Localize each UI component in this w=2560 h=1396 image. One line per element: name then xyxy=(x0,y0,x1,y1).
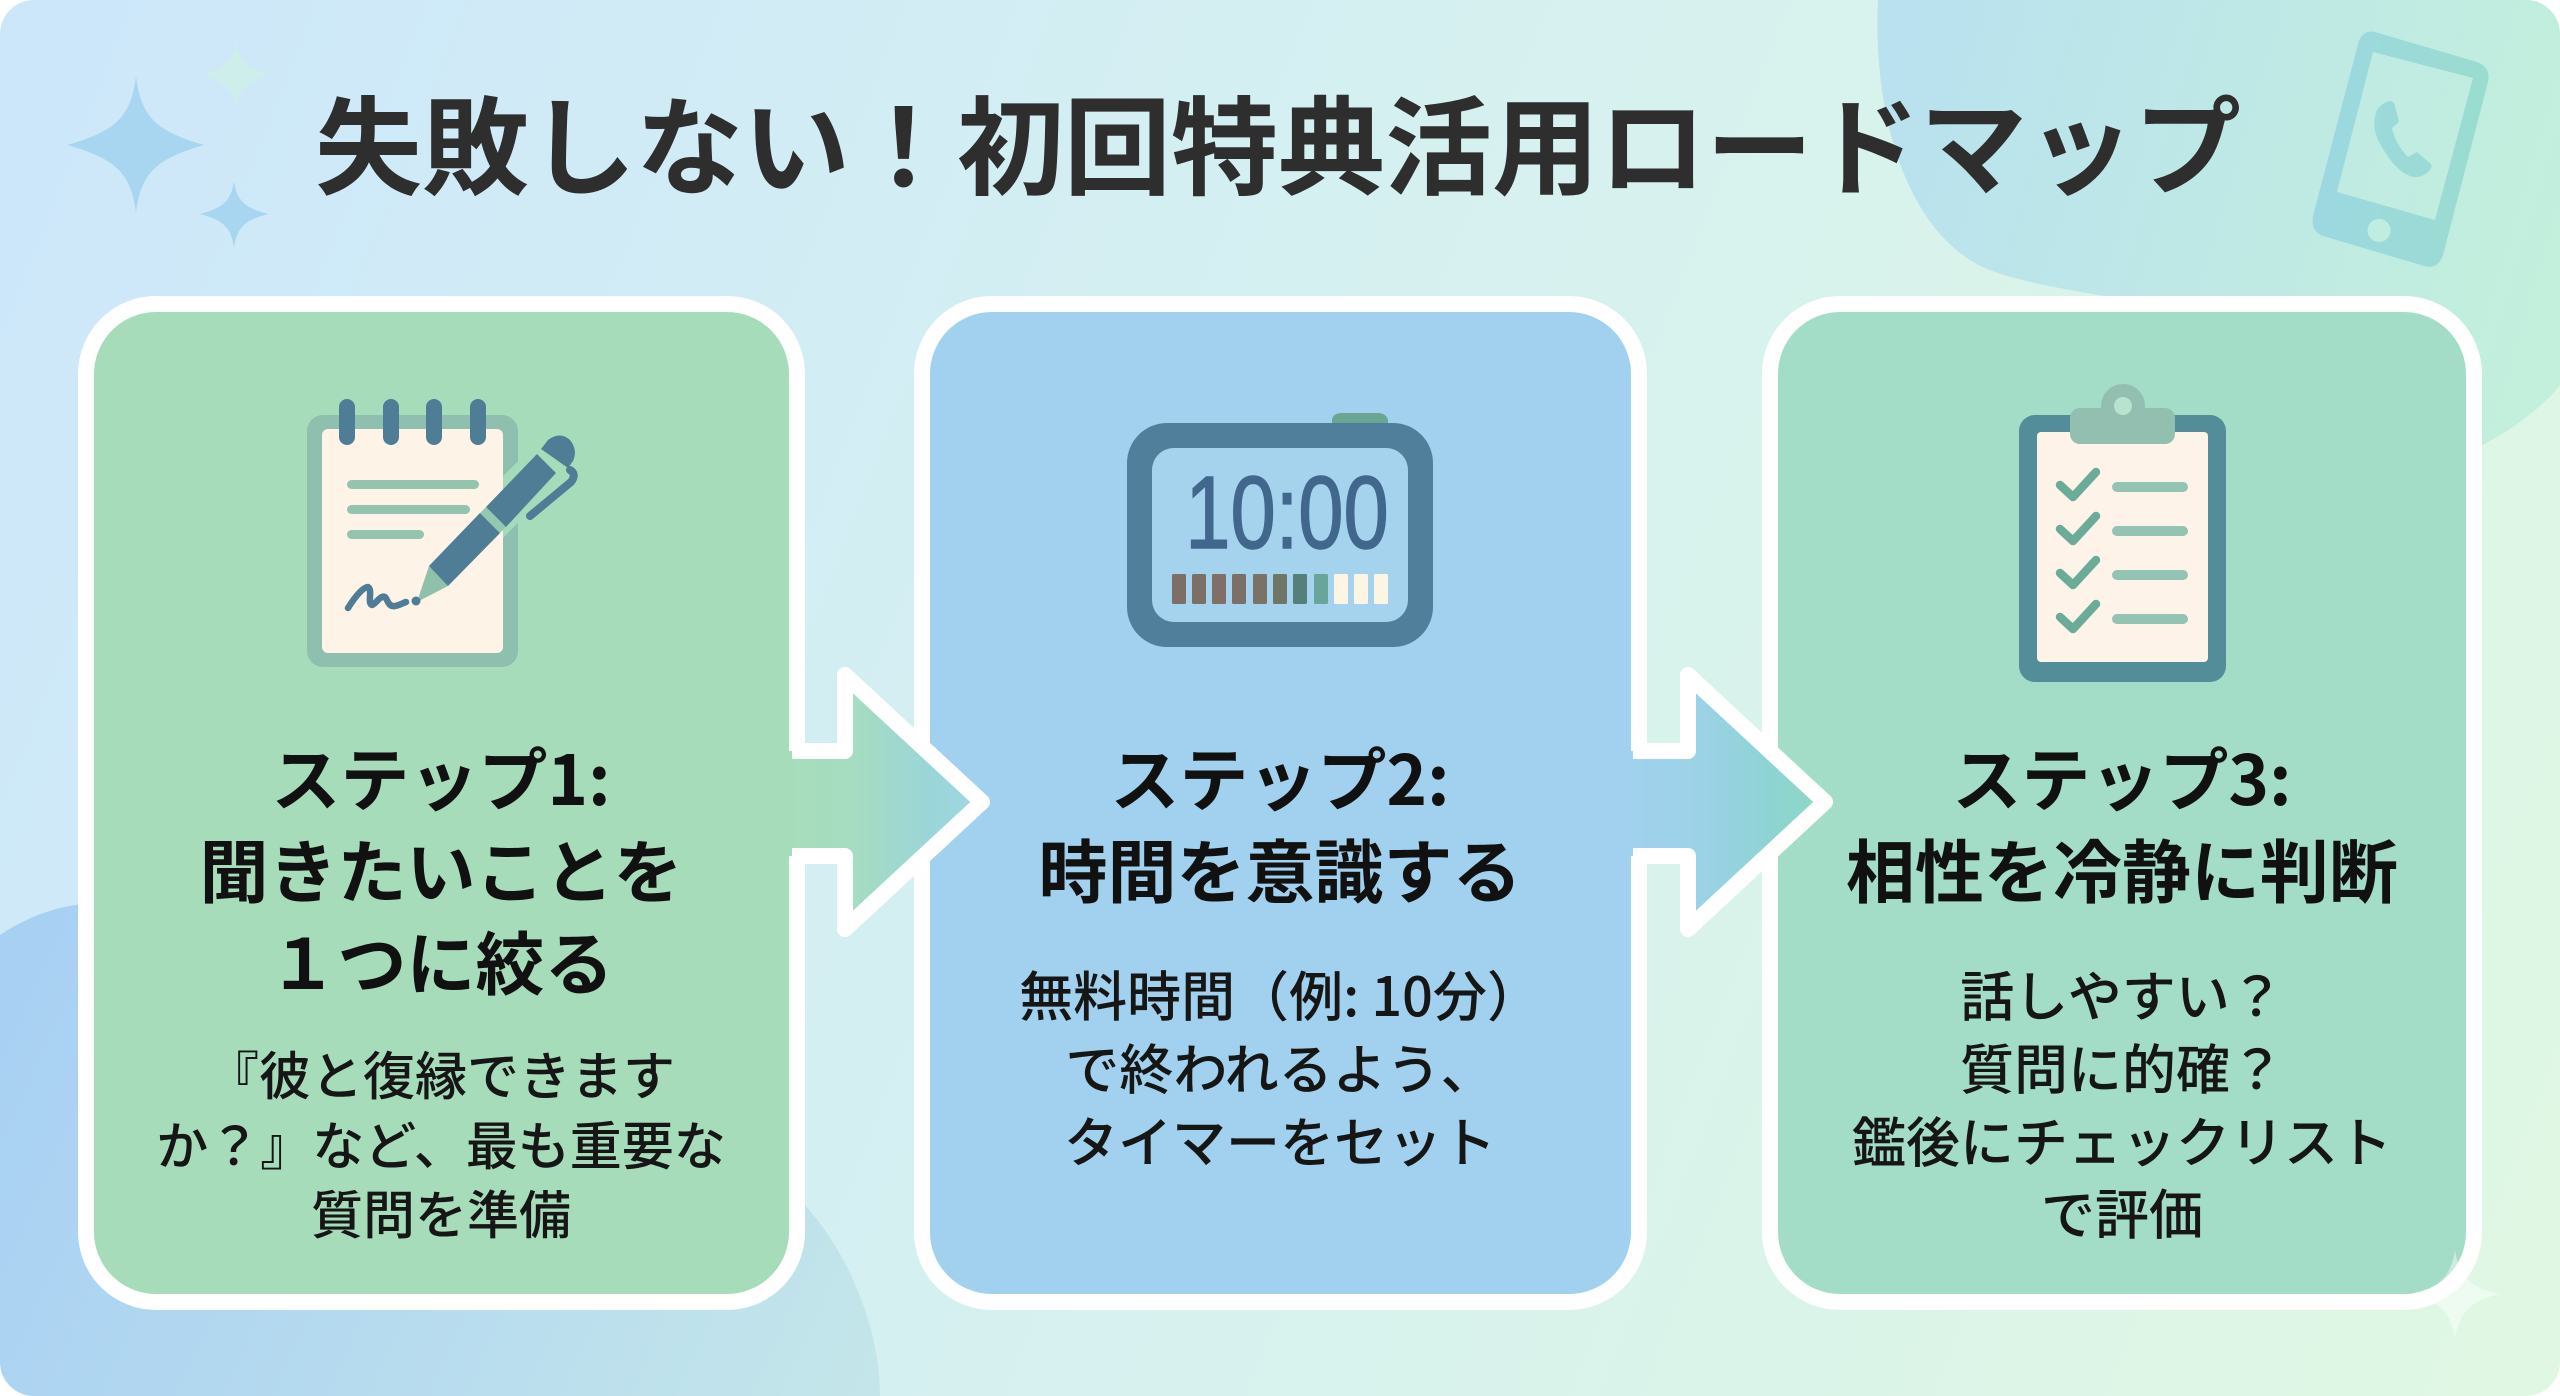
sparkle: bottom right xyxy=(2410,1250,2500,1339)
timer progress bar xyxy=(1172,574,1388,604)
icon: digital timer xyxy=(1127,413,1433,647)
heading: step 2: ステップ2: xyxy=(1110,725,1450,825)
panel: step 3 card xyxy=(1770,304,2474,1302)
body: step 3: 質問に的確？ xyxy=(1960,1026,2284,1105)
icon: phone xyxy=(2312,32,2489,267)
body: step 3: で評価 xyxy=(2041,1171,2203,1250)
body: step 2: 無料時間（例: 10分） xyxy=(1019,953,1541,1032)
sparkle: faint upper xyxy=(202,41,270,109)
icon: phone handset xyxy=(2374,101,2432,177)
panel: step 1 card xyxy=(86,304,797,1302)
background blob: bottom left xyxy=(0,903,880,1396)
heading: step 1: ステップ1: xyxy=(271,725,611,825)
sparkle: large xyxy=(67,76,204,213)
sparkle: small lower xyxy=(200,181,268,248)
body: step 1: か？』など、最も重要な xyxy=(156,1105,726,1180)
icon: clipboard checklist xyxy=(2019,384,2226,682)
heading: step 1: 聞きたいことを xyxy=(200,817,682,917)
body: step 1: 『彼と復縁できます xyxy=(207,1035,675,1110)
heading: step 3: ステップ3: xyxy=(1952,725,2292,825)
arrow: step 2 to step 3 xyxy=(1628,675,1825,929)
body: step 3: 話しやすい？ xyxy=(1960,953,2284,1032)
arrow: step 1 to step 2 xyxy=(786,675,982,929)
body: step 2: で終われるよう、 xyxy=(1065,1026,1495,1105)
body: step 3: 鑑後にチェックリスト xyxy=(1852,1099,2392,1178)
background blob: top right xyxy=(1877,0,2560,446)
icon: notepad and pen xyxy=(307,399,575,667)
heading: step 1: １つに絞る xyxy=(268,909,614,1009)
timer reading: 10:00 xyxy=(1185,455,1389,570)
heading: step 2: 時間を意識する xyxy=(1038,817,1522,917)
body: step 1: 質問を準備 xyxy=(311,1174,571,1249)
body: step 2: タイマーをセット xyxy=(1064,1099,1496,1178)
heading: step 3: 相性を冷静に判断 xyxy=(1846,817,2398,917)
title: 失敗しない！初回特典活用ロードマップ xyxy=(315,62,2241,217)
panel: step 2 card xyxy=(922,304,1639,1302)
